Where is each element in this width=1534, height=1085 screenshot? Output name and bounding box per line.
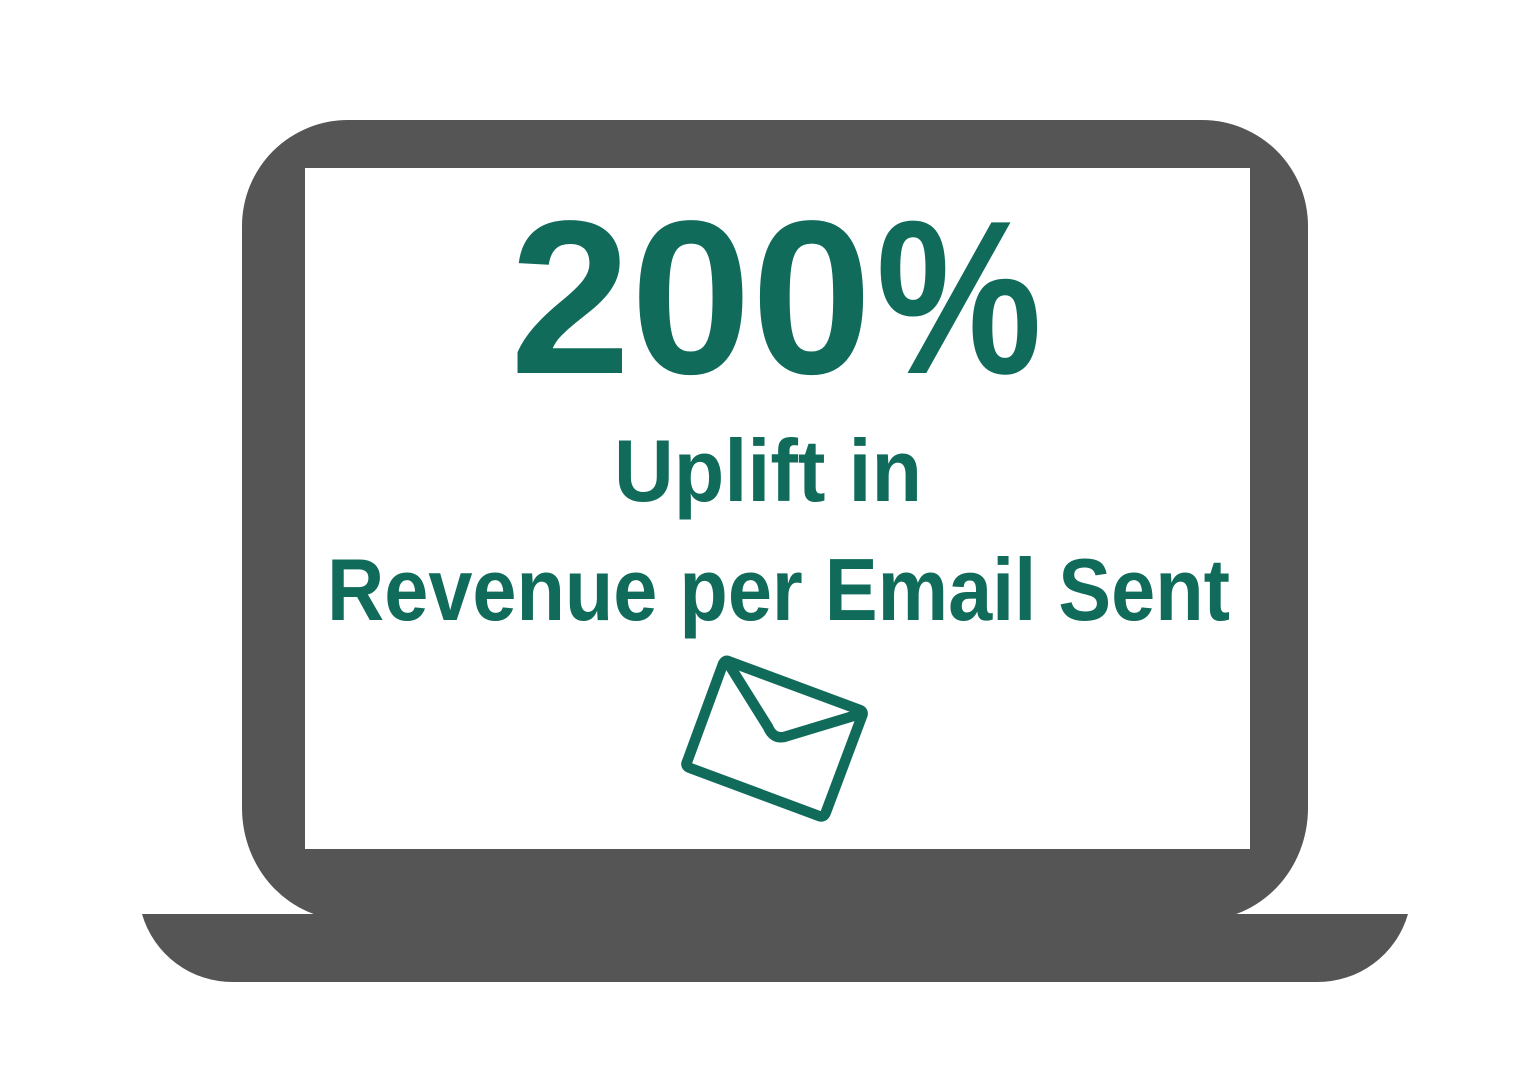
heading: Revenue per Email Sent: Revenue per Email Sent [327,540,1230,639]
icon: laptop [142,120,1408,982]
heading: Uplift in: Uplift in [614,421,922,520]
statistic: 200% [510,176,1042,420]
statistic: 200%: % [876,176,1042,420]
laptop screen [305,168,1250,849]
statistic: 200%: 200 [510,176,872,420]
laptop base [142,914,1408,982]
icon: envelope [686,661,863,816]
laptop body [242,120,1308,920]
